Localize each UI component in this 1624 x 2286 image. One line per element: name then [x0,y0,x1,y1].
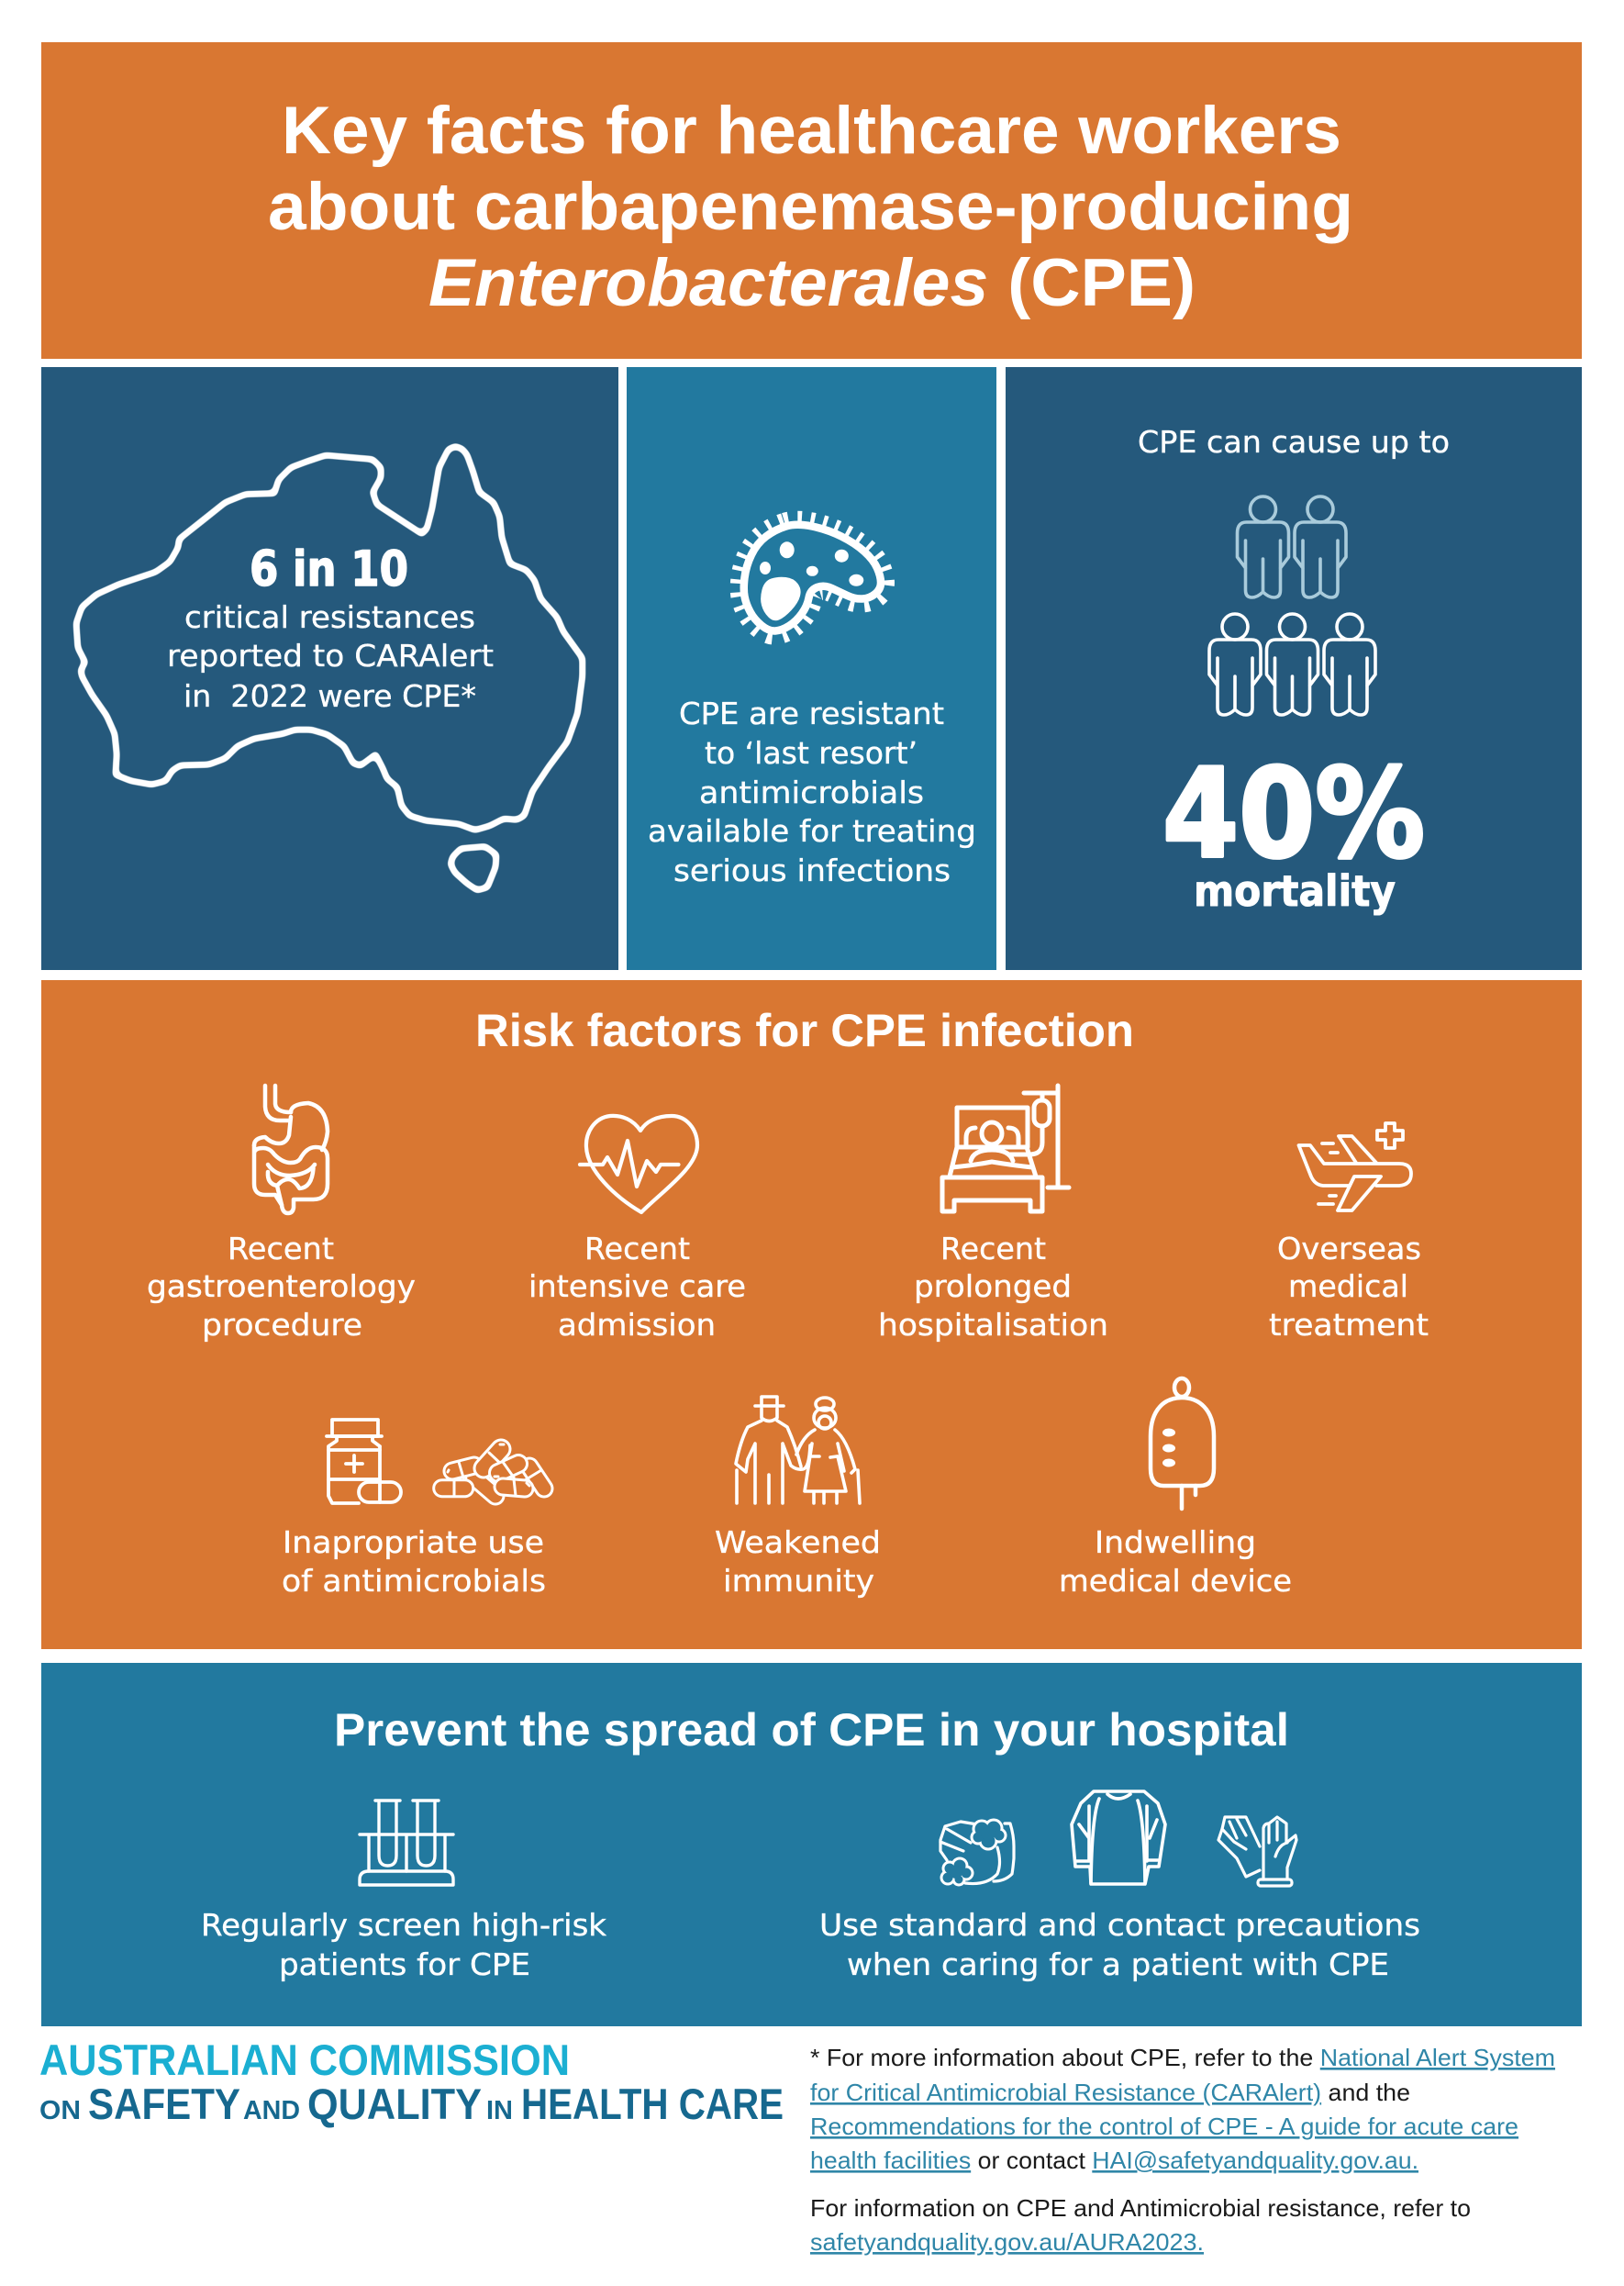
label: indwelling device: Indwelling [1095,1524,1256,1560]
icon: gown [1072,1791,1165,1884]
stat: 40%: 40% [1162,742,1425,886]
label: intensive care: admission [558,1307,716,1343]
text: resistant to last resort [648,696,976,888]
label: overseas treatment: treatment [1269,1307,1429,1343]
heading: prevent the spread: Prevent the spread of CPE in your hospital [334,1704,1289,1756]
text: mortality: mortality [1194,866,1396,916]
label: antimicrobials: Inapropriate use [283,1524,544,1560]
text: resistant to last resort: to ‘last resort’ [705,735,918,771]
label: gastroenterology: procedure [202,1307,362,1343]
footnote: more information: safetyandquality.gov.au/AURA2023. [810,2228,1204,2256]
icon: map of Australia [76,446,583,890]
text: resistant to last resort: antimicrobials [699,775,924,810]
title [268,94,1353,320]
title: Key facts for healthcare workers [282,94,1341,168]
label: screen patients: Regularly screen high-risk [201,1907,607,1943]
footnote: more information [810,2044,1555,2256]
panel: mortality [1006,367,1582,970]
label: gastroenterology: gastroenterology [147,1268,416,1304]
label: weakened immunity: Weakened [715,1524,881,1560]
panel: title banner [41,42,1582,359]
logo: Australian Commission on Safety and Quality in Health Care: IN [486,2096,513,2125]
text: resistant to last resort: CPE are resistant [679,696,944,731]
icon: indwelling device bag [1151,1378,1214,1509]
text: resistant to last resort: serious infections [673,853,951,888]
label: weakened immunity [715,1524,881,1599]
label: gastroenterology [147,1231,416,1343]
panel: last resort antimicrobials [627,367,996,970]
label: gastroenterology: Recent [228,1231,334,1266]
icon: elderly couple [736,1397,860,1503]
icon: digestive system [254,1086,328,1213]
icon: bacterium [744,525,881,631]
panel: 6 in 10 Australia [41,367,618,970]
label: antimicrobials: of antimicrobials [282,1563,546,1599]
icon: hospital bed [942,1086,1069,1211]
label: intensive care: intensive care [528,1268,746,1304]
text: CPE can cause up to: CPE can cause up to [1138,424,1450,460]
label: hospitalisation [878,1231,1108,1343]
footnote: more information: * For more information about CPE, refer to the National Alert System [810,2044,1555,2071]
label: screen patients [201,1907,607,1982]
heading: risk factors: Risk factors for CPE infection [475,1005,1134,1056]
logo: Australian Commission on Safety and Quality in Health Care: AND [243,2096,300,2125]
text: critical resistances: reported to CARAlert [167,638,494,674]
text: resistant to last resort: available for treating [648,813,976,849]
icon: test tubes [360,1801,453,1885]
label: standard and contact precautions [819,1907,1420,1982]
logo: Australian Commission on Safety and Quality in Health Care: AUSTRALIAN COMMISSION [39,2035,570,2084]
label: weakened immunity: immunity [723,1563,874,1599]
footnote: more information: for Critical Antimicrobial Resistance (CARAlert) and the [810,2079,1410,2106]
footnote: more information: health facilities or contact HAI@safetyandquality.gov.au. [810,2147,1418,2174]
stat: 6 in 10: 6 in 10 [250,541,408,597]
icon: gloves [1218,1817,1296,1886]
logo: Australian Commission on Safety and Quality in Health Care: HEALTH CARE [521,2080,784,2128]
logo: Australian Commission on Safety and Quality in Health Care: ON [39,2096,81,2125]
label: indwelling device: medical device [1059,1563,1292,1599]
label: hospitalisation: Recent [940,1231,1046,1266]
label: hospitalisation: hospitalisation [878,1307,1108,1343]
label: intensive care: Recent [584,1231,690,1266]
icon: soapy hands [940,1819,1014,1887]
footnote: more information: Recommendations for the control of CPE - A guide for acute care [810,2113,1518,2140]
label: hospitalisation: prolonged [914,1268,1072,1304]
logo: Australian Commission on Safety and Quality in Health Care: SAFETY [88,2080,240,2128]
panel: prevent the spread [41,1663,1582,2026]
text: critical resistances: in 2022 were CPE* [184,678,476,714]
panel: risk factors [41,980,1582,1649]
label: intensive care [528,1231,746,1343]
logo: Australian Commission on Safety and Quality in Health Care: QUALITY [307,2080,482,2128]
text: critical resistances [167,599,494,714]
label: screen patients: patients for CPE [279,1946,530,1982]
label: overseas treatment: Overseas [1277,1231,1421,1266]
label: standard and contact precautions: Use standard and contact precautions [819,1907,1420,1943]
label: standard and contact precautions: when caring for a patient with CPE [847,1946,1389,1982]
label: overseas treatment [1269,1231,1429,1343]
footnote: more information: For information on CPE and Antimicrobial resistance, refer to [810,2194,1471,2222]
title: Enterobacterales (CPE) [428,246,1196,320]
icon: heart with pulse [580,1116,697,1212]
text: critical resistances: critical resistances [184,599,475,635]
label: antimicrobials [282,1524,546,1599]
label: overseas treatment: medical [1288,1268,1408,1304]
icon: people, two of five shaded [1209,496,1375,715]
icon: plane with cross [1299,1123,1411,1210]
icon: medicine bottle and pills [327,1420,544,1503]
label: indwelling device [1059,1524,1292,1599]
logo: Australian Commission on Safety and Quality in Health Care [39,2035,784,2128]
title: about carbapenemase-producing [268,170,1353,244]
